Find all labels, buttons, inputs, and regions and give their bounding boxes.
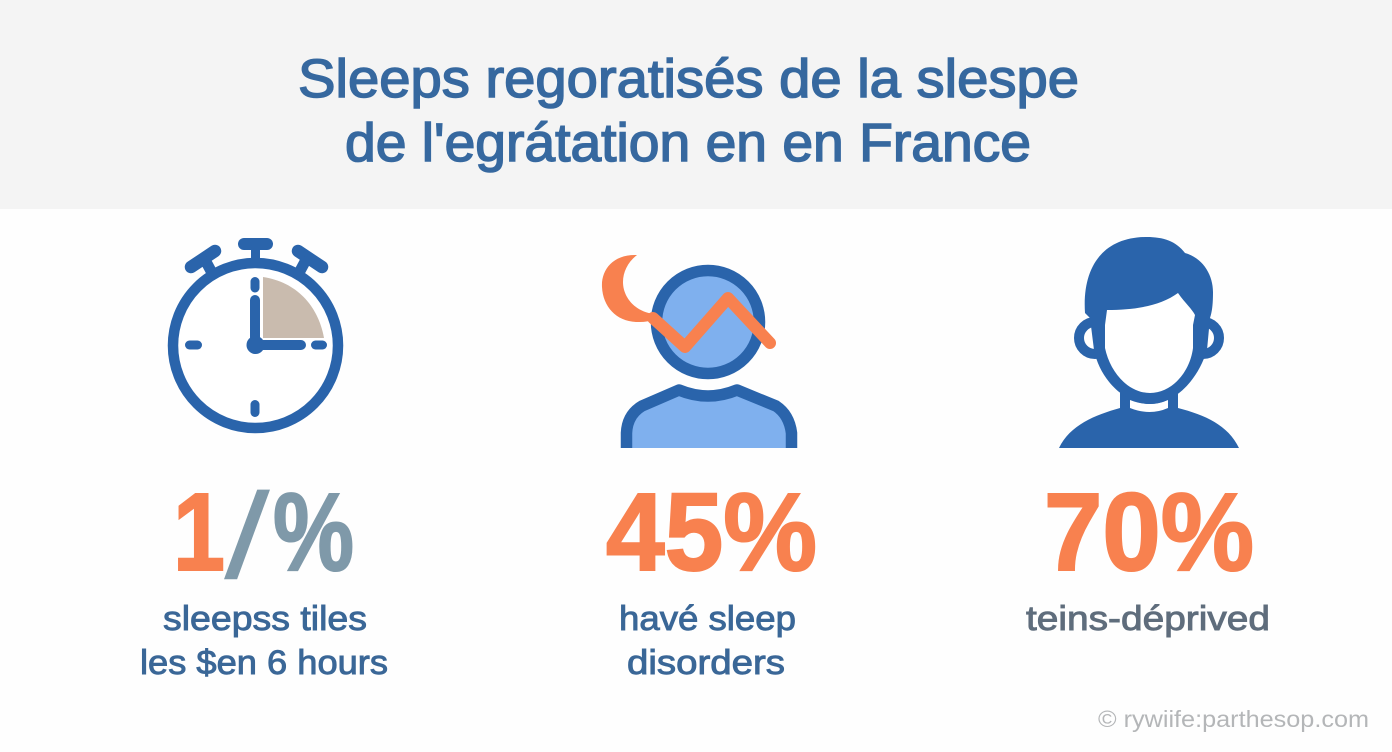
caption: sleep duration: les $en 6 hours [140, 644, 388, 682]
caption: sleep disorders: havé sleep [619, 600, 796, 638]
icon: person silhouette [1059, 237, 1239, 448]
big number: 1/%: 1 [173, 471, 225, 594]
caption: sleep disorders: disorders [627, 644, 785, 682]
caption: sleep duration [140, 600, 388, 682]
big number: 1/%: / [224, 468, 270, 604]
title: Sleeps regoratisés de la slespe [298, 49, 1079, 109]
header band with title [0, 0, 1392, 209]
big number: 45%: 45% [606, 471, 817, 594]
title [298, 49, 1079, 173]
big number: 1/%: % [273, 471, 354, 594]
caption: sleep disorders [619, 600, 796, 682]
caption: sleep deprived: teins-déprived [1026, 600, 1270, 638]
panel: sleep duration [140, 244, 388, 682]
caption: sleep duration: sleepss tiles [163, 600, 367, 638]
watermark: © rywiife:parthesop.com [1098, 706, 1369, 732]
big number: 1/% [173, 468, 354, 604]
big number: 70%: 70% [1044, 471, 1254, 594]
icon: stopwatch [173, 244, 338, 428]
icon: person with moon and zigzag line [602, 255, 792, 448]
panel: sleep disorders [602, 255, 817, 682]
title: de l'egrátation en en France [345, 113, 1031, 173]
panel: sleep deprived [1026, 237, 1270, 638]
